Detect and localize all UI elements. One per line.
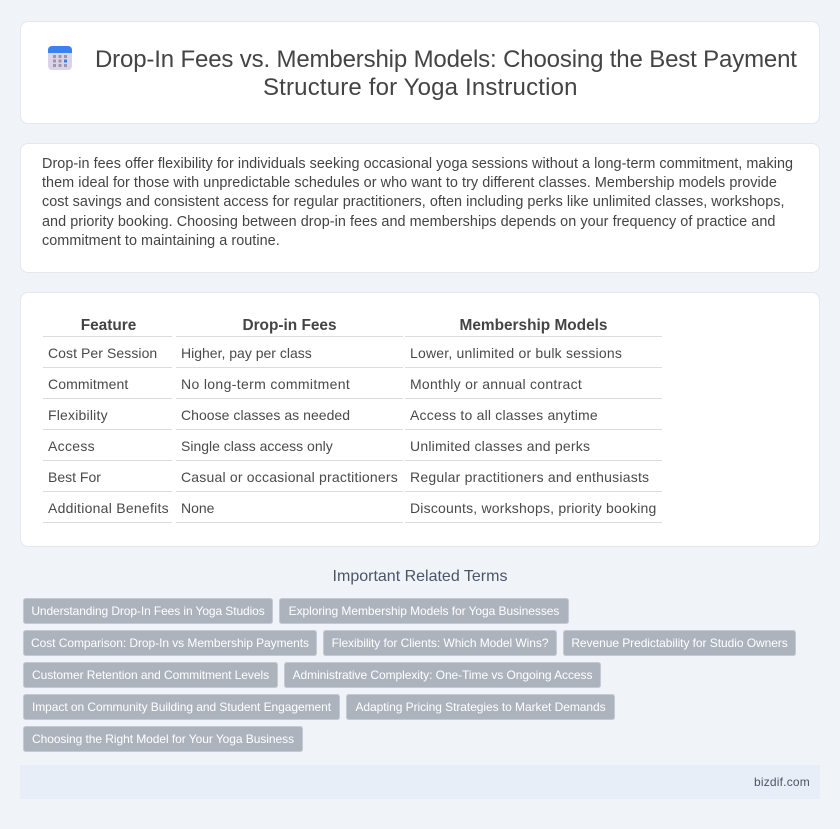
comparison table: Unlimited classes and perks	[410, 438, 590, 454]
table header: Drop-in Fees: Drop-in Fees	[242, 317, 337, 334]
tag	[284, 662, 601, 688]
title: Drop-In Fees vs. Membership Models: Choosing the Best Payment	[95, 46, 797, 73]
tag	[23, 630, 317, 656]
panel: comparison table	[20, 292, 820, 547]
tag	[563, 630, 796, 656]
related terms tags	[23, 598, 796, 752]
tag: Flexibility for Clients: Which Model Wins?	[332, 636, 548, 650]
panel: intro text card	[20, 143, 820, 273]
footer text: bizdif.com	[754, 775, 810, 789]
intro text: them ideal for those with unpredictable schedules or who want to try different classes. Membership models provide	[42, 175, 777, 191]
comparison table: Flexibility	[48, 407, 108, 423]
title	[95, 46, 797, 101]
comparison table: Monthly or annual contract	[410, 376, 582, 392]
comparison table: Cost Per Session	[48, 345, 157, 361]
tag: Customer Retention and Commitment Levels	[32, 668, 269, 682]
tag	[23, 662, 278, 688]
tag: Administrative Complexity: One-Time vs Ongoing Access	[293, 668, 592, 682]
intro text: and priority booking. Choosing between drop-in fees and memberships depends on your frequency of practice and	[42, 214, 775, 230]
tag	[346, 694, 615, 720]
tag	[23, 598, 273, 624]
intro text	[42, 156, 793, 249]
related terms heading: Important Related Terms	[333, 568, 507, 585]
tag: Cost Comparison: Drop-In vs Membership Payments	[31, 636, 309, 650]
comparison table: Lower, unlimited or bulk sessions	[410, 345, 622, 361]
comparison table: Access	[48, 438, 95, 454]
table header: Feature: Feature	[81, 317, 136, 334]
comparison table: Regular practitioners and enthusiasts	[410, 469, 649, 485]
footer bar	[20, 765, 820, 799]
intro text: cost savings and consistent access for regular practitioners, often including perks like unlimited classes, workshops,	[42, 194, 785, 210]
tag: Revenue Predictability for Studio Owners	[571, 636, 788, 650]
comparison table: Access to all classes anytime	[410, 407, 598, 423]
comparison table: Casual or occasional practitioners	[181, 469, 398, 485]
comparison table: Best For	[48, 469, 101, 485]
panel: title card	[20, 21, 820, 124]
comparison table: No long-term commitment	[181, 376, 350, 392]
tag: Exploring Membership Models for Yoga Businesses	[289, 604, 559, 618]
tag: Choosing the Right Model for Your Yoga Business	[32, 732, 294, 746]
comparison table: Discounts, workshops, priority booking	[410, 500, 656, 516]
title: Structure for Yoga Instruction	[263, 74, 578, 101]
tag	[323, 630, 557, 656]
tag: Adapting Pricing Strategies to Market Demands	[355, 700, 606, 714]
comparison table: None	[181, 500, 214, 516]
comparison table: Higher, pay per class	[181, 345, 312, 361]
tag	[23, 726, 303, 752]
tag	[23, 694, 340, 720]
tag	[279, 598, 569, 624]
tag: Understanding Drop-In Fees in Yoga Studios	[31, 604, 265, 618]
intro text: commitment to maintaining a routine.	[42, 233, 280, 249]
tag: Impact on Community Building and Student Engagement	[32, 700, 331, 714]
comparison table: Additional Benefits	[48, 500, 169, 516]
icon: calendar	[48, 46, 72, 70]
comparison table: Commitment	[48, 376, 128, 392]
intro text: Drop-in fees offer flexibility for individuals seeking occasional yoga sessions without a long-term commitment, making	[42, 156, 793, 172]
comparison table: Choose classes as needed	[181, 407, 350, 423]
comparison table: Single class access only	[181, 438, 333, 454]
comparison table	[43, 317, 662, 523]
table header: Membership Models: Membership Models	[460, 317, 607, 334]
